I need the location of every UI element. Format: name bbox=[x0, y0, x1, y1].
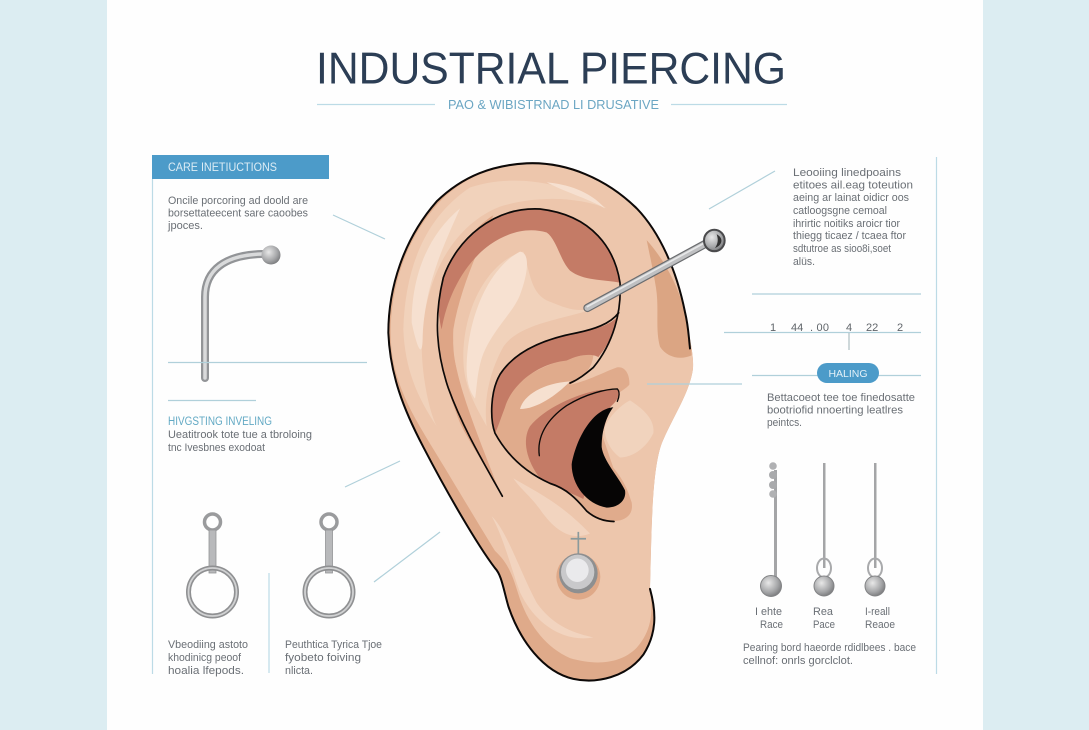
badge: healing bbox=[752, 363, 921, 383]
panel: right details bbox=[724, 157, 936, 674]
text block: right description bbox=[793, 167, 913, 268]
text block: healing description: bootriofid nnoerting leatlres bbox=[767, 404, 904, 416]
ear: antihelix highlight bbox=[453, 235, 620, 437]
text block: healing description: Bettacoeot tee toe finedosatte bbox=[767, 392, 915, 404]
text block: right description: catloogsgne cemoal bbox=[793, 205, 887, 217]
pin labels: Race bbox=[760, 619, 783, 631]
text block: ring caption one: Vbeodiing astoto bbox=[168, 639, 248, 651]
pin labels: Reaoe bbox=[865, 619, 895, 631]
icon: looped pin one bbox=[814, 463, 834, 596]
number scale: 44 bbox=[791, 322, 803, 334]
ear: contour lines bbox=[388, 163, 690, 681]
heading: care instructions bbox=[152, 155, 329, 179]
text block: right description: ihrirtic noitiks aroicr tior bbox=[793, 218, 900, 230]
number scale: . 00 bbox=[810, 322, 829, 334]
text block: healing note: tnc Ivesbnes exodoat bbox=[168, 442, 265, 454]
pin labels: Rea bbox=[813, 606, 834, 618]
pin labels: I ehte bbox=[755, 606, 782, 618]
text block: care intro bbox=[167, 195, 308, 232]
text block: ring caption one bbox=[168, 639, 248, 677]
text block: right description: Leooiing linedpoains bbox=[793, 167, 902, 179]
text block: healing note bbox=[168, 416, 312, 454]
pin labels: Pace bbox=[813, 619, 835, 631]
text block: ring caption two: nlicta. bbox=[285, 665, 313, 677]
text block: healing description bbox=[767, 392, 915, 429]
illustration: ear with piercing bbox=[380, 150, 725, 703]
ear: lower highlights bbox=[492, 478, 593, 638]
icon: ring jewelry one bbox=[188, 514, 236, 616]
icon: looped pin two bbox=[865, 463, 885, 596]
number scale: 22 bbox=[866, 322, 878, 334]
icon: curved barbell bbox=[205, 246, 280, 378]
text block: pin caption: cellnof: onrls gorclclot. bbox=[743, 655, 853, 667]
number scale: 2 bbox=[897, 322, 903, 334]
text block: ring caption one: hoalia lfepods. bbox=[168, 665, 244, 677]
text block: pin caption: Pearing bord haeorde rdidlbees . bace bbox=[743, 642, 916, 654]
text block: right description: sdtutroe as sioo8i,soet bbox=[793, 243, 891, 255]
ear: scapha shading bbox=[438, 209, 620, 492]
ear: industrial barbell bbox=[587, 230, 725, 308]
text block: healing note: HIVGSTING INVELING bbox=[168, 416, 272, 428]
text block: pin caption bbox=[743, 642, 916, 667]
subtitle with rules: PAO & WIBISTRNAD LI DRUSATIVE bbox=[448, 98, 659, 112]
ear: canal bbox=[572, 407, 625, 508]
ear: lobe stud bbox=[556, 532, 600, 600]
text block: ring caption two bbox=[285, 639, 382, 677]
text block: right description: alüs. bbox=[793, 256, 815, 268]
pin labels bbox=[755, 606, 895, 631]
text block: care intro: borsettateecent sare caoobes bbox=[168, 208, 308, 220]
heading: care instructions: CARE INETIUCTIONS bbox=[168, 162, 277, 174]
text block: healing note: Ueatitrook tote tue a tbroloing bbox=[168, 429, 312, 441]
ear: concha shading bbox=[492, 316, 653, 521]
title: INDUSTRIAL PIERCING bbox=[316, 44, 786, 94]
text block: ring caption two: Peuthtica Tyrica Tjoe bbox=[285, 639, 382, 651]
text block: care intro: Oncile porcoring ad doold are bbox=[168, 195, 308, 207]
number scale bbox=[770, 322, 903, 350]
icon: ring jewelry two bbox=[305, 514, 353, 616]
icon: beaded pin bbox=[760, 462, 782, 596]
text block: ring caption one: khodinicg peoof bbox=[168, 652, 242, 664]
text block: ring caption two: fyobeto foiving bbox=[285, 652, 361, 664]
leader lines bbox=[333, 171, 775, 582]
text block: right description: aeing ar lainat oidicr oos bbox=[793, 192, 909, 204]
text block: right description: thiegg ticaez / tcaea ftor bbox=[793, 230, 906, 242]
text block: healing description: peintcs. bbox=[767, 417, 802, 429]
text block: right description: etitoes ail.eag toteution bbox=[793, 180, 913, 192]
panel: left care instructions bbox=[152, 155, 382, 677]
pin labels: I-reall bbox=[865, 606, 890, 618]
text block: care intro: jpoces. bbox=[167, 220, 203, 232]
badge: healing: HALING bbox=[828, 368, 868, 380]
number scale: 4 bbox=[846, 322, 852, 334]
number scale: 1 bbox=[770, 322, 776, 334]
